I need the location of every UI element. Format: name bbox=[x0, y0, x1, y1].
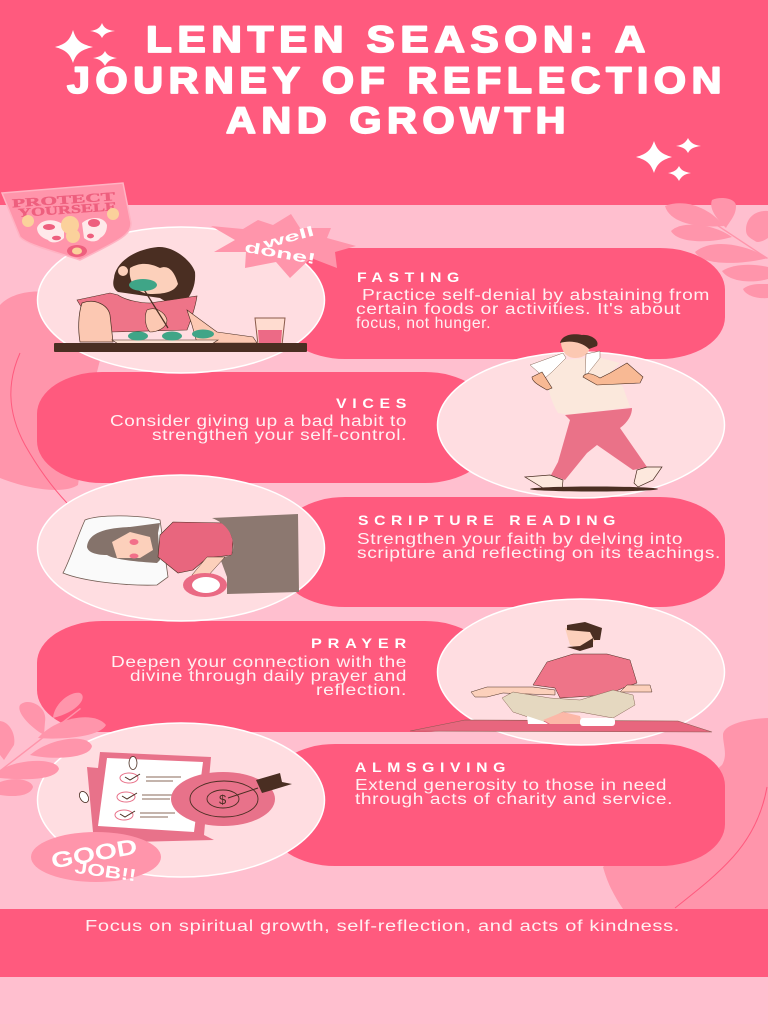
title: JOURNEY OF REFLECTION bbox=[67, 60, 727, 101]
text: footer message: Focus on spiritual growth, self-reflection, and acts of kindness. bbox=[85, 918, 680, 935]
header band bbox=[0, 0, 768, 205]
text: fasting: FASTING bbox=[357, 269, 465, 285]
illustration: woman eating bbox=[54, 247, 307, 352]
badge: protect yourself: YOURSELF bbox=[18, 199, 116, 220]
footer band bbox=[0, 909, 768, 977]
text: prayer: Deepen your connection with the bbox=[111, 654, 407, 671]
illustration: woman walking bbox=[525, 334, 662, 492]
panel: scripture reading bbox=[280, 497, 725, 607]
illustration: checklist and target: $ bbox=[219, 792, 227, 807]
text: vices: VICES bbox=[336, 395, 412, 411]
text: fasting: certain foods or activities. It's about bbox=[356, 301, 681, 318]
badge: protect yourself bbox=[2, 183, 131, 260]
background blob: left bbox=[0, 292, 110, 503]
text: almsgiving: ALMSGIVING bbox=[355, 759, 511, 775]
text: scripture reading bbox=[357, 512, 721, 562]
text: scripture reading: SCRIPTURE READING bbox=[358, 512, 621, 528]
text: vices: Consider giving up a bad habit to bbox=[110, 413, 407, 430]
badge: well done: well bbox=[260, 223, 316, 252]
title bbox=[67, 19, 727, 141]
badge: well done: done! bbox=[243, 239, 317, 268]
illustration: woman sleeping bbox=[63, 514, 299, 597]
text: prayer: divine through daily prayer and bbox=[130, 668, 407, 685]
illustration: checklist and target bbox=[78, 752, 292, 843]
circle: vices bbox=[438, 352, 724, 498]
circle: fasting bbox=[38, 227, 324, 373]
background blob: bottom right bbox=[603, 718, 768, 909]
badge: good job: GOOD bbox=[49, 834, 139, 873]
illustration: man meditating bbox=[410, 622, 712, 732]
circle: scripture bbox=[38, 475, 324, 621]
badge: protect yourself: PROTECT bbox=[12, 189, 115, 210]
text: fasting bbox=[356, 269, 710, 332]
text: almsgiving: Extend generosity to those in need bbox=[355, 777, 667, 794]
title: LENTEN SEASON: A bbox=[146, 19, 651, 60]
icon: sparkles bottom right bbox=[636, 138, 701, 181]
leaves: top right bbox=[665, 198, 768, 298]
badge: good job bbox=[31, 832, 161, 885]
text: prayer bbox=[111, 635, 412, 699]
text: almsgiving bbox=[355, 759, 673, 808]
leaves: bottom left bbox=[0, 693, 106, 796]
circle: prayer bbox=[438, 599, 724, 745]
text: prayer: PRAYER bbox=[311, 635, 412, 651]
circle: almsgiving bbox=[38, 723, 324, 877]
text: prayer: reflection. bbox=[316, 682, 407, 699]
badge: good job: JOB!! bbox=[73, 858, 138, 885]
panel: almsgiving bbox=[270, 744, 725, 866]
text: almsgiving: through acts of charity and service. bbox=[355, 791, 673, 808]
text: fasting: focus, not hunger. bbox=[356, 315, 491, 332]
panel: fasting bbox=[280, 248, 725, 359]
panel: vices bbox=[37, 372, 490, 483]
panel: prayer bbox=[37, 621, 490, 732]
text: vices bbox=[110, 395, 412, 444]
title: AND GROWTH bbox=[226, 100, 571, 141]
text: scripture reading: Strengthen your faith by delving into bbox=[357, 531, 683, 548]
text: vices: strengthen your self-control. bbox=[152, 427, 407, 444]
text: scripture reading: scripture and reflecting on its teachings. bbox=[357, 545, 721, 562]
badge: well done bbox=[211, 214, 356, 278]
text: fasting: Practice self-denial by abstaining from bbox=[362, 287, 710, 304]
icon: sparkles top left bbox=[55, 23, 117, 66]
